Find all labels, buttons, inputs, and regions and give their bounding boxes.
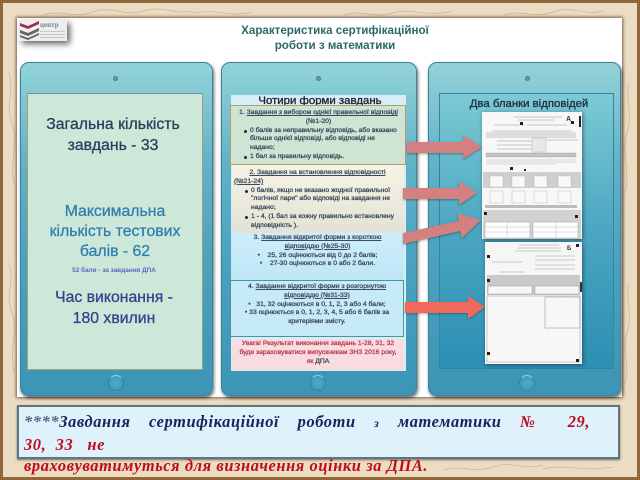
- task box 4: • 33 оцінюється в 0, 1, 2, 3, 4, 5 або 6 балів за: [245, 309, 389, 316]
- footnote text: враховуватимуться для визначення оцінки за ДПА.: [24, 456, 428, 475]
- icon: tablet camera: [316, 76, 321, 81]
- arrow 4: [404, 296, 486, 320]
- time text: 180 хвилин: [73, 310, 155, 326]
- total tasks text: Загальна кількість: [46, 116, 180, 133]
- max score text: балів - 62: [80, 243, 150, 260]
- panel: answer sheets tablet: [428, 62, 621, 396]
- task box 1: (№1-20): [306, 118, 331, 125]
- task box 2: 2. Завдання на встановлення відповідності: [250, 169, 385, 176]
- logo: центр: [40, 21, 59, 29]
- task box 1: 1. Завдання з вибором однієї правильної відповіді: [239, 109, 398, 116]
- task box 2: [232, 165, 404, 233]
- task box 2: відповідність ).: [251, 222, 298, 229]
- task box 4: • 31, 32 оцінюються в 0, 1, 2, 3 або 4 бали;: [248, 301, 386, 308]
- task box 1: [230, 105, 406, 165]
- title: Характеристика сертифікаційної: [241, 24, 429, 37]
- task box 1: 1 бал за правильну відповідь.: [250, 153, 344, 160]
- task box 1: більше однієї відповіді, або відповіді не: [250, 135, 375, 142]
- warning box: як ДПА: [307, 358, 329, 365]
- icon: home button: [108, 375, 124, 391]
- task box 2: 0 балів, якщо не вказано жодної правильної: [251, 187, 390, 194]
- total tasks text: [46, 116, 180, 154]
- icon: tablet camera: [113, 76, 118, 81]
- task box 3: 3. Завдання відкритої форми з короткою: [254, 234, 381, 241]
- answer sheet B: [483, 240, 586, 368]
- task box 4: відповіддю (№31-33): [284, 292, 350, 299]
- answer sheets screen: [439, 93, 614, 369]
- footnote text: 30, 33 не: [24, 435, 105, 454]
- icon: tablet camera: [525, 76, 530, 81]
- max score text: кількість тестових: [50, 223, 180, 240]
- task box 3: • 27-30 оцінюються в 0 або 2 бали.: [260, 260, 375, 267]
- footnote box: [17, 405, 620, 459]
- total tasks text: завдань - 33: [68, 136, 158, 154]
- task box 4: критеріями змісту.: [288, 318, 346, 325]
- icon: home button: [519, 375, 535, 391]
- task box 3: відповіддю (№25-30): [285, 243, 350, 250]
- icon: home button: [310, 375, 326, 391]
- task box 4: 4. Завдання відкритої форми з розгорнутою: [248, 283, 386, 290]
- heading: two answer sheets: Два бланки відповідей: [470, 98, 588, 110]
- white slide area: [17, 18, 622, 397]
- title: [241, 24, 429, 52]
- time text: [55, 289, 173, 326]
- answer sheet B: Б: [567, 246, 572, 252]
- DPA note: 52 бали - за завдання ДПА: [72, 267, 156, 274]
- logo: [19, 20, 67, 41]
- answer sheet A: [480, 110, 586, 242]
- task box 1: 0 балів за неправильну відповідь, або вказано: [250, 127, 397, 134]
- answer sheet A: А: [566, 116, 571, 123]
- arrow 1: [406, 135, 482, 160]
- task box 2: (№21-24): [234, 178, 263, 185]
- overview screen: [27, 93, 203, 370]
- forms screen: [231, 95, 406, 371]
- time text: Час виконання -: [55, 289, 173, 306]
- warning box: [232, 339, 404, 370]
- task box 1: надано;: [250, 144, 275, 151]
- task box 2: 1 - 4, (1 бал за кожну правильно встановлену: [251, 213, 394, 220]
- warning box: Увага! Результат виконання завдань 1-28, 31, 32: [242, 340, 394, 347]
- footnote text: [24, 412, 590, 475]
- task box 2: надано;: [251, 204, 276, 211]
- warning box: буде зараховуватися випускникам ЗНЗ 2016 року,: [239, 349, 397, 356]
- title: роботи з математики: [275, 39, 395, 52]
- heading: four forms: Чотири форми завдань: [258, 95, 382, 107]
- task box 4: [230, 280, 404, 337]
- max score text: Максимальна: [65, 203, 165, 220]
- arrow 3: [402, 213, 481, 246]
- task box 2: "логічної пари" або відповіді на завдання не: [251, 195, 390, 202]
- max score text: [50, 203, 180, 260]
- arrow 2: [402, 181, 478, 206]
- footnote text: ****Завдання сертифікаційної роботи з математики № 29,: [24, 412, 590, 431]
- panel: overview tablet: [20, 62, 213, 396]
- task box 3: • 25, 26 оцінюються від 0 до 2 балів;: [258, 252, 377, 259]
- task box 3: [231, 233, 404, 280]
- panel: four task forms tablet: [221, 62, 417, 396]
